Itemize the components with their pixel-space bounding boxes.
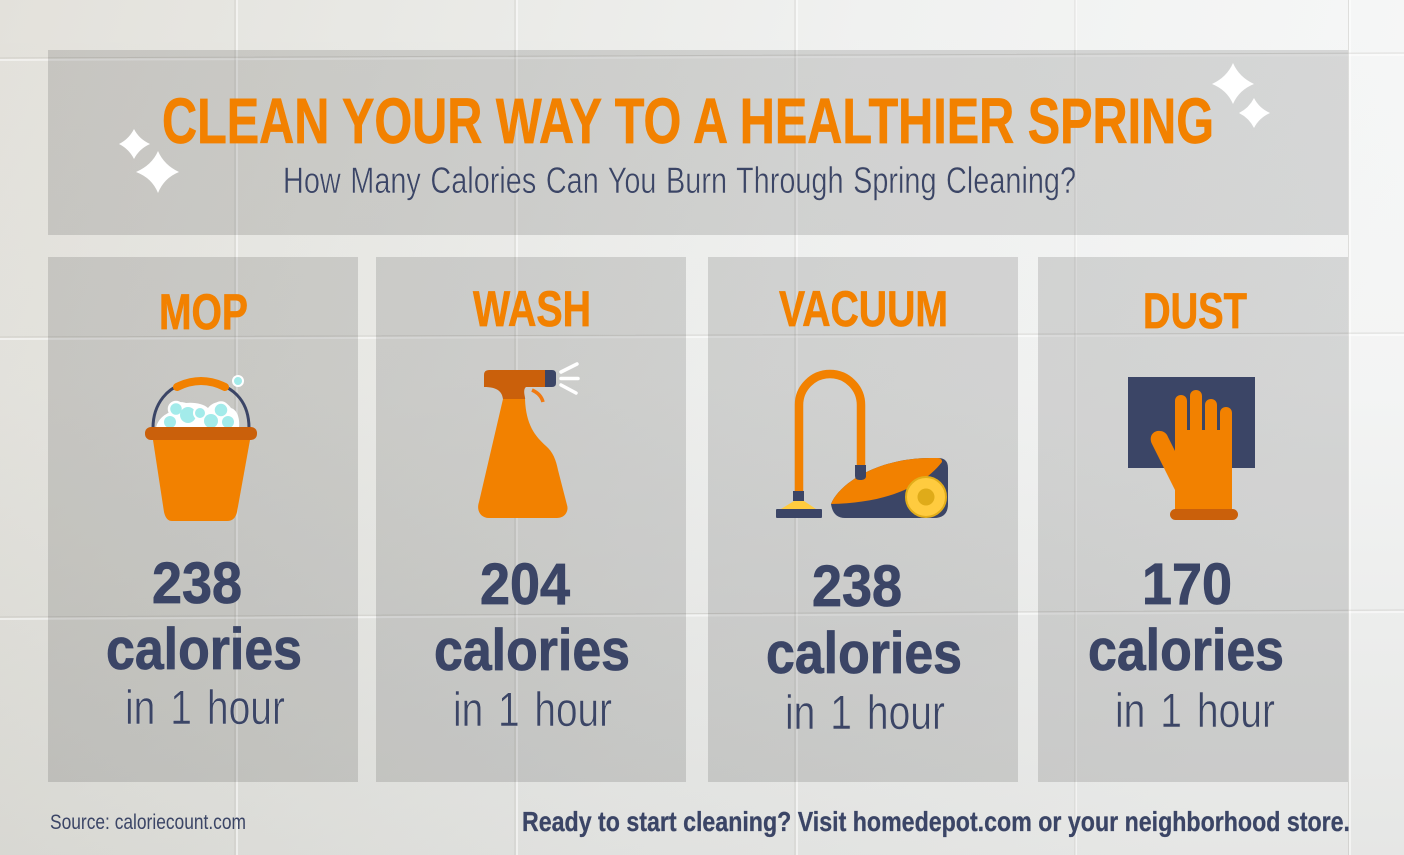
icon: spray bottle [478,364,578,518]
heading: mop: MOP [159,284,248,340]
stat: mop: in 1 hour [125,682,285,735]
stat: vacuum: in 1 hour [785,687,945,740]
icon: sparkles left [119,129,179,193]
stat: dust: calories [1088,618,1284,683]
stat: dust: in 1 hour [1115,685,1275,738]
stat: dust: 170 [1142,552,1232,617]
stat: wash: 204 [480,552,570,617]
panel: header band [48,50,1348,235]
stat: mop: calories [106,617,302,682]
icon: glove on cloth [1128,377,1255,520]
stat: vacuum: 238 [812,554,902,619]
stat: wash [434,552,630,737]
panel: wash [376,257,686,782]
stat: dust [1088,552,1284,738]
heading: wash: WASH [473,281,591,337]
subtitle: How Many Calories Can You Burn Through Spring Cleaning? [283,160,1076,201]
source note: Source: caloriecount.com [50,811,246,834]
panel: dust [1038,257,1348,782]
stat: wash: in 1 hour [453,684,612,737]
icon: sparkles right [1212,63,1270,128]
stat: wash: calories [434,618,630,683]
heading: dust: DUST [1143,283,1247,339]
icon: bucket [145,376,257,521]
icon: vacuum cleaner [776,374,948,518]
stat: vacuum: calories [766,621,962,686]
stat: vacuum [766,554,962,740]
panel: vacuum [708,257,1018,782]
heading: vacuum: VACUUM [779,281,948,337]
stat: mop: 238 [152,551,242,616]
panel: mop [48,257,358,782]
stat: mop [106,551,302,735]
